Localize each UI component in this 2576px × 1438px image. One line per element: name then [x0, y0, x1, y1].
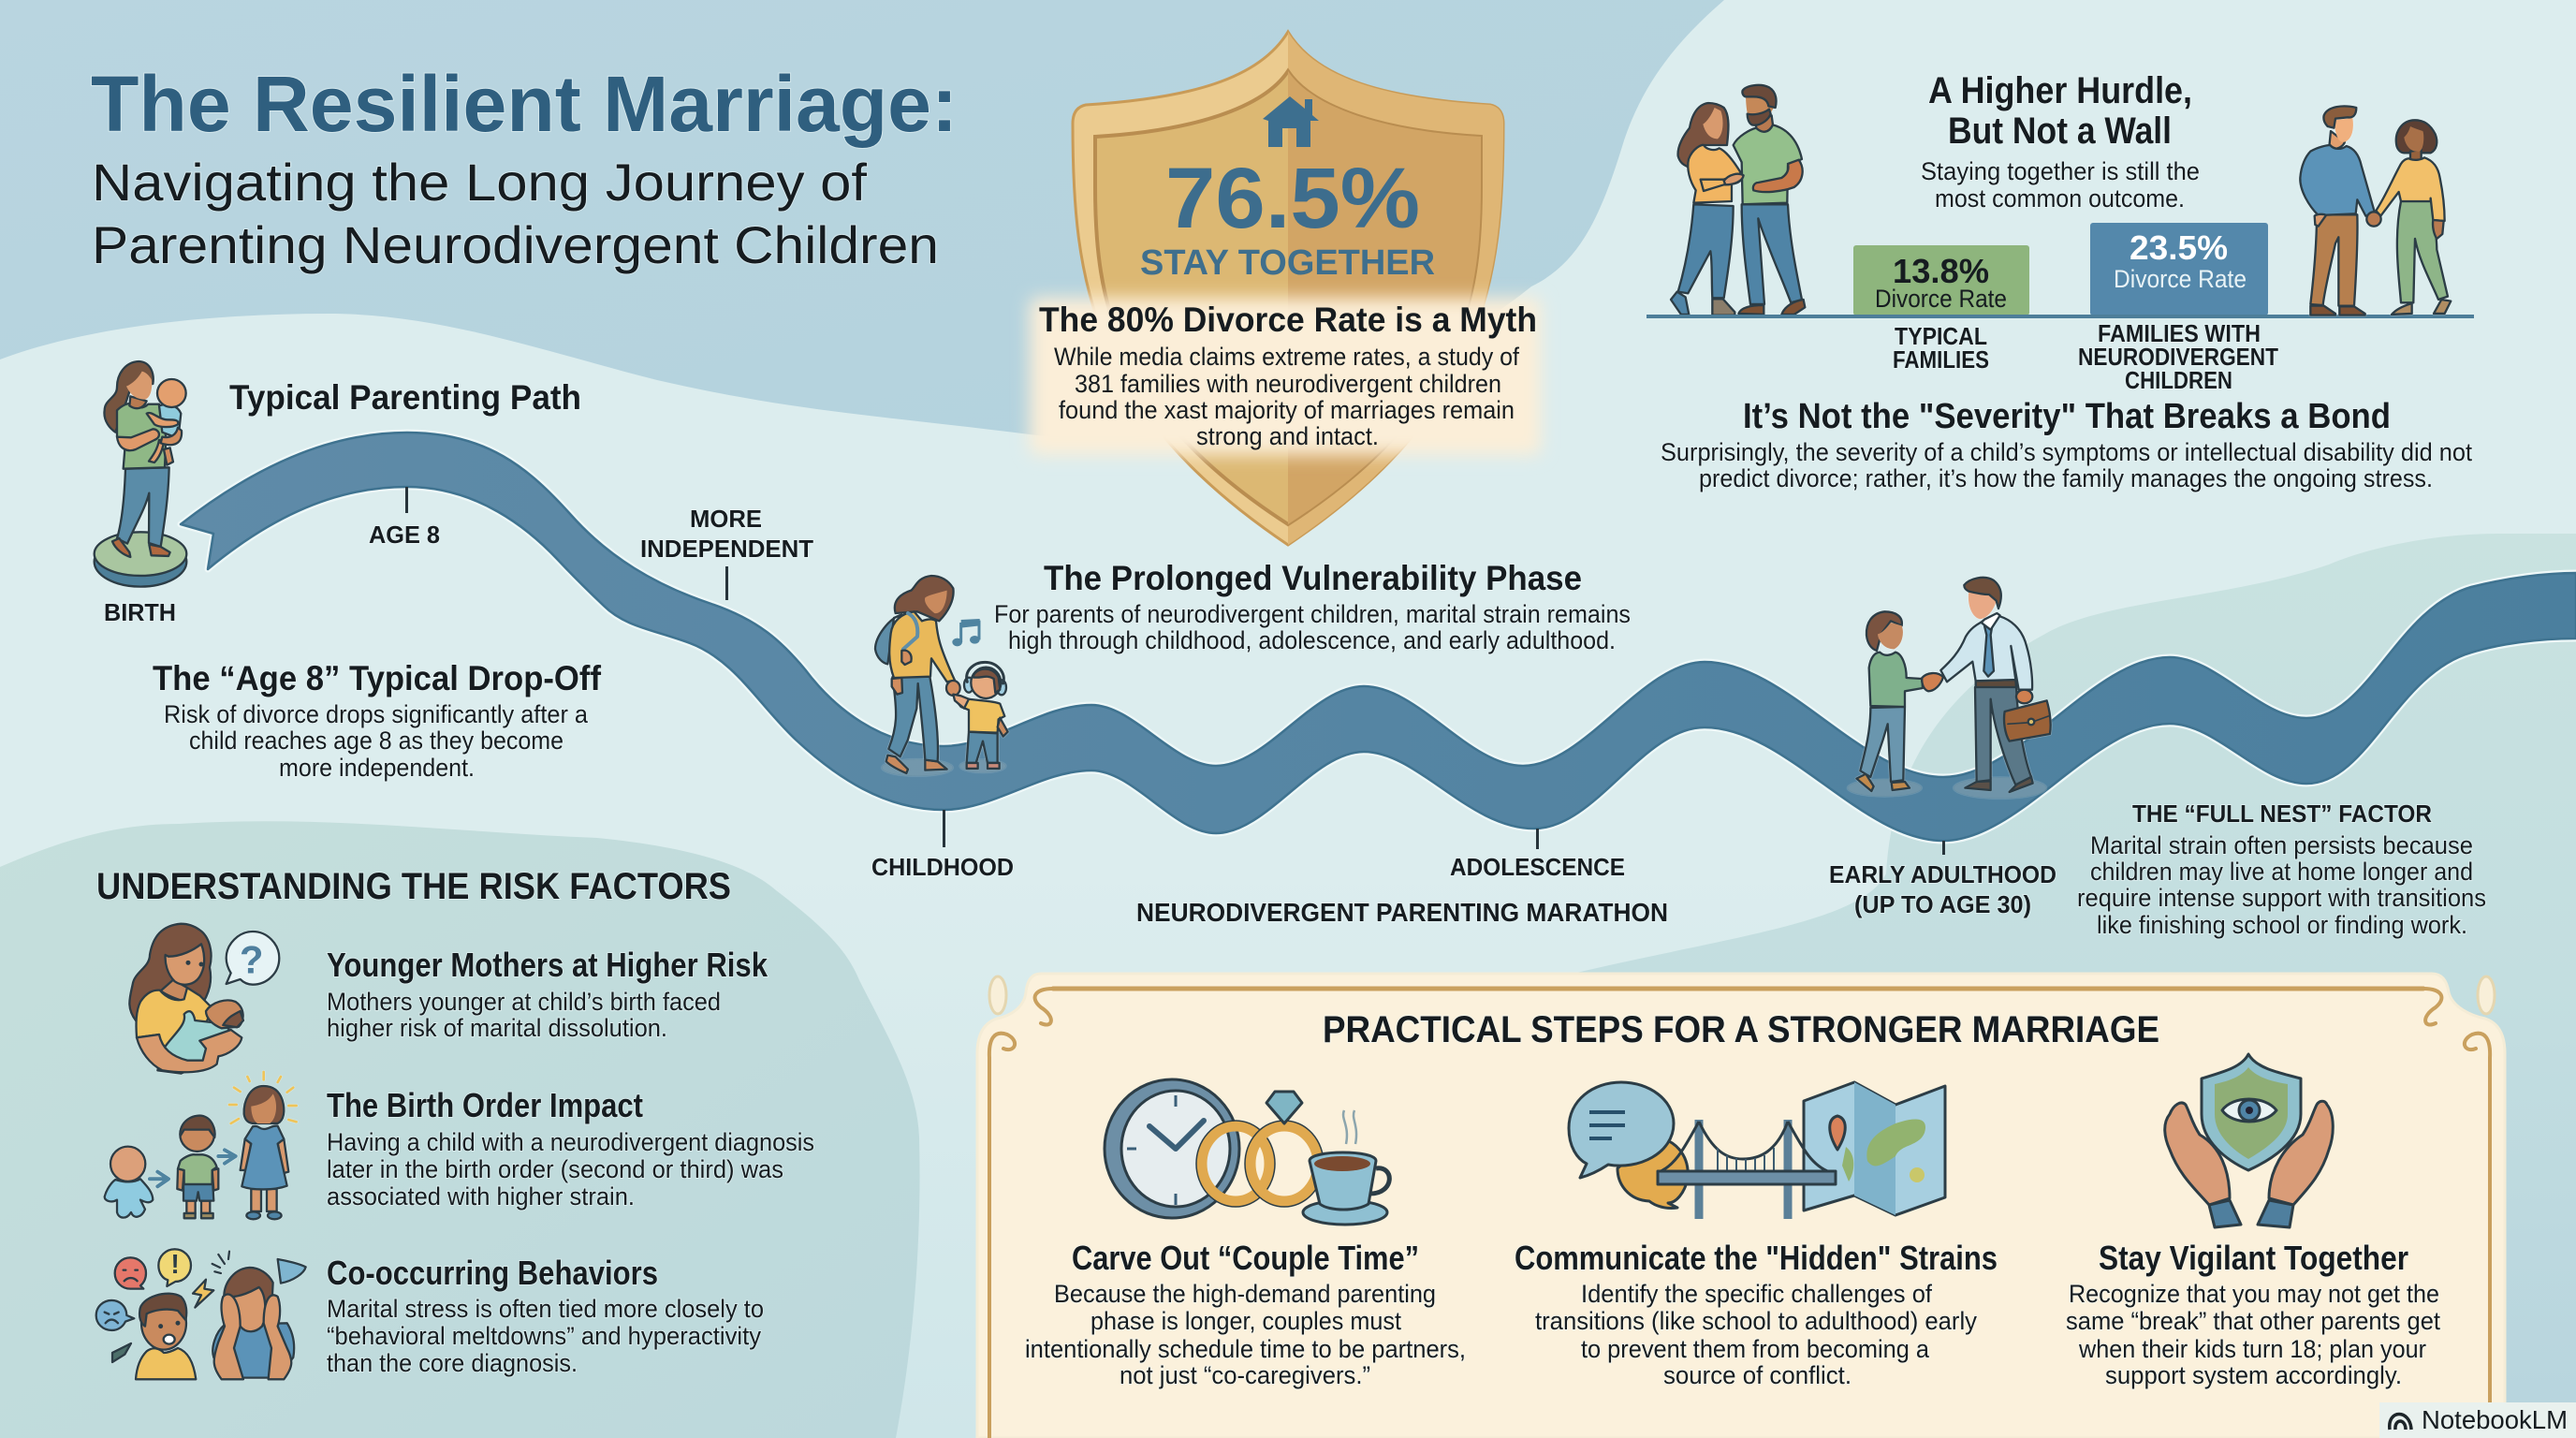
- text block: severity: Surprisingly, the severity of a child’s symptoms or intellectual disability did not: [1661, 438, 2472, 466]
- myth body: While media claims extreme rates, a study of: [1054, 343, 1519, 371]
- text block: age 8 drop-off: Risk of divorce drops significantly after a: [164, 700, 589, 728]
- axis label: typical families: [1893, 322, 1989, 374]
- myth body: [1054, 343, 1519, 450]
- shield: 76.5% stay together: [1073, 32, 1503, 545]
- step: hidden strains: transitions (like school to adulthood) early: [1535, 1307, 1977, 1335]
- bar: neurodivergent families: 23.5%: [2130, 228, 2228, 267]
- axis label: typical families: TYPICAL: [1895, 322, 1987, 350]
- step: vigilant together: same “break” that other parents get: [2066, 1307, 2440, 1335]
- text block: prolonged vulnerability phase: high through childhood, adolescence, and early adulthood.: [1008, 626, 1616, 654]
- step: couple time: not just “co-caregivers.”: [1120, 1361, 1370, 1389]
- icon: hands shield eye: [2165, 1054, 2333, 1227]
- item: younger mothers: higher risk of marital dissolution.: [327, 1014, 667, 1042]
- item: younger mothers: Mothers younger at child’s birth faced: [327, 988, 721, 1016]
- text block: full nest factor: children may live at home longer and: [2090, 858, 2473, 886]
- step: hidden strains: [1515, 1239, 1998, 1389]
- item: birth order: [327, 1086, 814, 1211]
- myth body: strong and intact.: [1196, 422, 1379, 450]
- step: couple time: phase is longer, couples must: [1090, 1307, 1401, 1335]
- text block: age 8 drop-off: more independent.: [279, 754, 475, 782]
- decorative frame: [989, 989, 2490, 1438]
- axis label: neurodivergent families: [2078, 319, 2278, 394]
- label: birth: BIRTH: [104, 598, 176, 626]
- icon: mother holding baby on platform: [95, 361, 186, 587]
- icon: young mother with baby: ?: [240, 937, 263, 981]
- label: more independent with tick: MORE: [690, 505, 762, 533]
- item: birth order: Having a child with a neurodivergent diagnosis: [327, 1128, 814, 1156]
- icon: couple right: [2300, 106, 2451, 315]
- text block: full nest factor: like finishing school or finding work.: [2097, 911, 2467, 939]
- step: hidden strains: to prevent them from becoming a: [1581, 1335, 1930, 1363]
- step: vigilant together: [2066, 1239, 2440, 1389]
- title: The Resilient Marriage:: [91, 60, 958, 148]
- label: adolescence with tick: ADOLESCENCE: [1450, 853, 1625, 881]
- step: couple time: intentionally schedule time to be partners,: [1025, 1335, 1466, 1363]
- text block: prolonged vulnerability phase: The Prolonged Vulnerability Phase: [1044, 559, 1582, 597]
- bar: typical families: 13.8%: [1893, 252, 1989, 290]
- item: birth order: associated with higher strain.: [327, 1182, 635, 1211]
- text block: prolonged vulnerability phase: For parents of neurodivergent children, marital strain remains: [994, 600, 1631, 628]
- bar: typical families: [1853, 245, 2029, 315]
- shield: 76.5% stay together: STAY TOGETHER: [1140, 243, 1435, 283]
- text block: age 8 drop-off: The “Age 8” Typical Drop-Off: [153, 659, 602, 697]
- panel: practical steps: [977, 974, 2505, 1438]
- item: co-occurring behaviors: than the core diagnosis.: [327, 1349, 578, 1377]
- text block: severity: It’s Not the "Severity" That Breaks a Bond: [1743, 397, 2391, 436]
- typical path heading: Typical Parenting Path: [229, 378, 581, 417]
- title: [91, 60, 958, 274]
- icon: couple left: [1671, 85, 1805, 315]
- risk heading: UNDERSTANDING THE RISK FACTORS: [96, 866, 731, 907]
- icon: birth order children: [105, 1072, 297, 1219]
- label: more independent with tick: [640, 505, 813, 600]
- text block: age 8 drop-off: child reaches age 8 as they become: [189, 726, 564, 755]
- text block: age 8 drop-off: [153, 659, 602, 782]
- watermark: NotebookLM: NotebookLM: [2422, 1405, 2568, 1434]
- step: couple time: Carve Out “Couple Time”: [1072, 1239, 1419, 1277]
- text block: higher hurdle: Staying together is still the: [1921, 157, 2200, 185]
- label: age 8 with tick: [369, 487, 440, 549]
- icon: mother and child walking: [875, 576, 1008, 776]
- item: younger mothers: Younger Mothers at Higher Risk: [327, 946, 768, 984]
- icon: co-occurring behaviours: [96, 1249, 306, 1379]
- text block: higher hurdle: But Not a Wall: [1948, 110, 2172, 152]
- label: early adulthood with tick: (UP TO AGE 30): [1854, 890, 2031, 918]
- icon: speech bridge map: [1569, 1082, 1945, 1219]
- bar: neurodivergent families: Divorce Rate: [2114, 265, 2247, 293]
- step: couple time: Because the high-demand parenting: [1054, 1280, 1436, 1308]
- step: hidden strains: Communicate the "Hidden" Strains: [1515, 1239, 1998, 1277]
- text block: full nest factor: Marital strain often persists because: [2090, 831, 2473, 859]
- label: more independent with tick: INDEPENDENT: [640, 535, 813, 563]
- icon: young mother with baby: [129, 924, 279, 1074]
- text block: severity: predict divorce; rather, it’s how the family manages the ongoing stress.: [1699, 464, 2433, 492]
- text block: full nest factor: THE “FULL NEST” FACTOR: [2132, 800, 2432, 828]
- axis label: neurodivergent families: NEURODIVERGENT: [2078, 343, 2278, 371]
- text block: higher hurdle: most common outcome.: [1935, 184, 2185, 213]
- icon: co-occurring behaviours: !: [170, 1250, 180, 1280]
- text block: full nest factor: [2077, 800, 2486, 939]
- text block: higher hurdle: [1921, 70, 2200, 213]
- step: hidden strains: Identify the specific challenges of: [1581, 1280, 1932, 1308]
- panel: risk factors: [96, 866, 814, 1379]
- panel: 80% myth: [1030, 298, 1541, 455]
- watermark: NotebookLM: [2379, 1402, 2576, 1438]
- icon: handshake young adult and father: [1847, 578, 2051, 799]
- myth body: 381 families with neurodivergent children: [1075, 370, 1501, 398]
- label: neurodivergent parenting marathon: NEURODIVERGENT PARENTING MARATHON: [1136, 898, 1668, 927]
- text block: severity: [1661, 397, 2472, 492]
- label: age 8 with tick: AGE 8: [369, 521, 440, 549]
- axis label: neurodivergent families: CHILDREN: [2125, 366, 2232, 394]
- label: early adulthood with tick: [1829, 841, 2056, 918]
- icon: music note: [952, 619, 980, 646]
- item: birth order: The Birth Order Impact: [327, 1086, 643, 1124]
- title: Parenting Neurodivergent Children: [92, 215, 939, 274]
- text block: full nest factor: require intense support with transitions: [2077, 884, 2486, 912]
- step: vigilant together: Recognize that you may not get the: [2069, 1280, 2439, 1308]
- step: hidden strains: source of conflict.: [1663, 1361, 1852, 1389]
- label: adolescence with tick: [1450, 829, 1625, 881]
- item: co-occurring behaviors: [327, 1254, 764, 1377]
- step: vigilant together: when their kids turn 18; plan your: [2078, 1335, 2426, 1363]
- title: Navigating the Long Journey of: [92, 153, 867, 212]
- bar: neurodivergent families: [2090, 223, 2268, 315]
- step: vigilant together: support system accordingly.: [2105, 1361, 2402, 1389]
- item: co-occurring behaviors: “behavioral meltdowns” and hyperactivity: [327, 1322, 761, 1350]
- item: younger mothers: [327, 946, 768, 1042]
- item: birth order: later in the birth order (second or third) was: [327, 1155, 783, 1183]
- journey path ribbon: [181, 433, 2576, 841]
- text block: higher hurdle: A Higher Hurdle,: [1928, 70, 2192, 111]
- item: co-occurring behaviors: Co-occurring Behaviors: [327, 1254, 658, 1292]
- myth body: found the xast majority of marriages remain: [1059, 396, 1515, 424]
- axis label: neurodivergent families: FAMILIES WITH: [2098, 319, 2261, 347]
- practical heading: PRACTICAL STEPS FOR A STRONGER MARRIAGE: [1323, 1009, 2159, 1050]
- item: co-occurring behaviors: Marital stress is often tied more closely to: [327, 1295, 764, 1323]
- ornament: corner leaves: [989, 976, 2495, 1014]
- label: childhood with tick: CHILDHOOD: [871, 853, 1014, 881]
- bar: typical families: Divorce Rate: [1875, 285, 2007, 313]
- icon: clock rings coffee: [1105, 1079, 1389, 1225]
- step: couple time: [1025, 1239, 1466, 1389]
- step: vigilant together: Stay Vigilant Together: [2099, 1239, 2408, 1277]
- text block: prolonged vulnerability phase: [994, 559, 1631, 654]
- bar chart: divorce rates: [1647, 223, 2474, 394]
- axis label: typical families: FAMILIES: [1893, 345, 1989, 374]
- label: childhood with tick: [871, 810, 1014, 881]
- shield: 76.5% stay together: 76.5%: [1165, 151, 1420, 246]
- label: early adulthood with tick: EARLY ADULTHOOD: [1829, 860, 2056, 888]
- myth heading: The 80% Divorce Rate is a Myth: [1039, 301, 1537, 339]
